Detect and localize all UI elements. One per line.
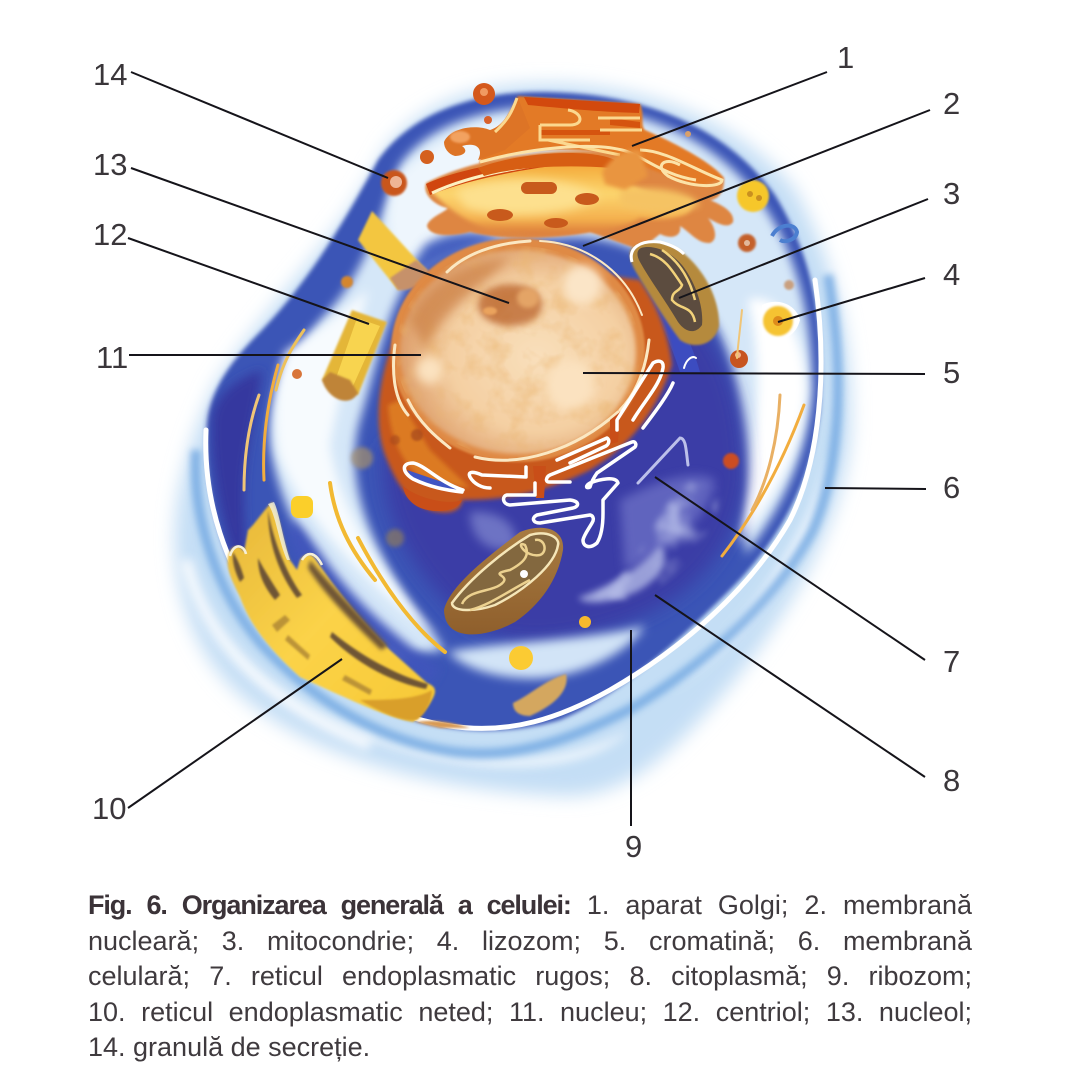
golgi upper stack: [480, 96, 724, 186]
rough endoplasmic reticulum: [403, 357, 696, 547]
leader 10: [128, 659, 342, 808]
nucleus mottling: [400, 246, 637, 448]
leader 6: [825, 488, 926, 489]
golgi plate: [428, 161, 692, 233]
organelle: secretion granule: [381, 170, 407, 196]
filaments: [244, 310, 804, 652]
number 3: 3: [943, 176, 960, 211]
cell membrane: [206, 280, 821, 728]
ER orange stems: [533, 466, 546, 498]
nucleolus: [478, 284, 542, 326]
number 7: 7: [943, 644, 960, 679]
organelle: yellow centriole upper: [358, 211, 428, 290]
organelle: golgi apparatus: [425, 96, 733, 250]
leader 3: [679, 199, 928, 298]
leader 12: [128, 238, 369, 324]
number 6: 6: [943, 470, 960, 505]
number 1: 1: [837, 40, 854, 75]
leader 7: [655, 477, 925, 660]
nuclear envelope strokes: [394, 241, 649, 460]
mitochondrion lower: [444, 528, 563, 634]
nucleus: [390, 238, 650, 465]
caption text: nucleară; 3. mitocondrie; 4. lizozom; 5. cromatină; 6. membrană: [88, 926, 972, 956]
leader 1: [632, 72, 827, 146]
panel: cytoplasm: [207, 92, 821, 730]
number 13: 13: [93, 147, 127, 182]
leader 2: [583, 110, 930, 246]
smooth ER violet pathway: [638, 438, 688, 483]
leader lines: [128, 72, 930, 826]
golgi outer lobes: [425, 151, 733, 250]
number 9: 9: [625, 829, 642, 864]
leader 8: [655, 595, 925, 777]
number 8: 8: [943, 763, 960, 798]
leader 4: [778, 278, 925, 322]
cell illustration with labels: [94, 47, 960, 858]
leader 11: [129, 354, 421, 356]
number 5: 5: [943, 355, 960, 390]
organelle: secretory droplets: [292, 83, 794, 469]
number 2: 2: [943, 86, 960, 121]
number 14: 14: [93, 57, 127, 92]
label target: centriole: [322, 310, 387, 401]
caption text: 10. reticul endoplasmatic neted; 11. nucleu; 12. centriol; 13. nucleol;: [88, 996, 972, 1026]
golgi bulb: [444, 98, 530, 160]
organelle: lysosome: [762, 302, 800, 340]
leader 14: [131, 72, 388, 178]
panel: outer cell halo: [175, 84, 851, 796]
leader 13: [131, 168, 509, 303]
caption text: [88, 890, 972, 1062]
number 11: 11: [96, 340, 128, 375]
number labels: [92, 40, 960, 864]
leader 5: [583, 373, 925, 374]
caption text: celulară; 7. reticul endoplasmatic rugos; 8. citoplasmă; 9. ribozom;: [88, 961, 972, 991]
mitochondrion upper right: [630, 242, 719, 345]
yellow granules: [291, 180, 797, 716]
organelle: endoplasmic orange body: [379, 260, 672, 512]
number 12: 12: [93, 217, 127, 252]
caption text: Fig. 6. Organizarea generală a celulei: 1. aparat Golgi; 2. membrană: [88, 890, 972, 920]
smooth endoplasmic reticulum (yellow): [228, 502, 470, 728]
caption text: 14. granulă de secreție.: [88, 1032, 370, 1062]
leader 9: [630, 630, 632, 826]
number 4: 4: [943, 257, 960, 292]
number 10: 10: [92, 791, 126, 826]
